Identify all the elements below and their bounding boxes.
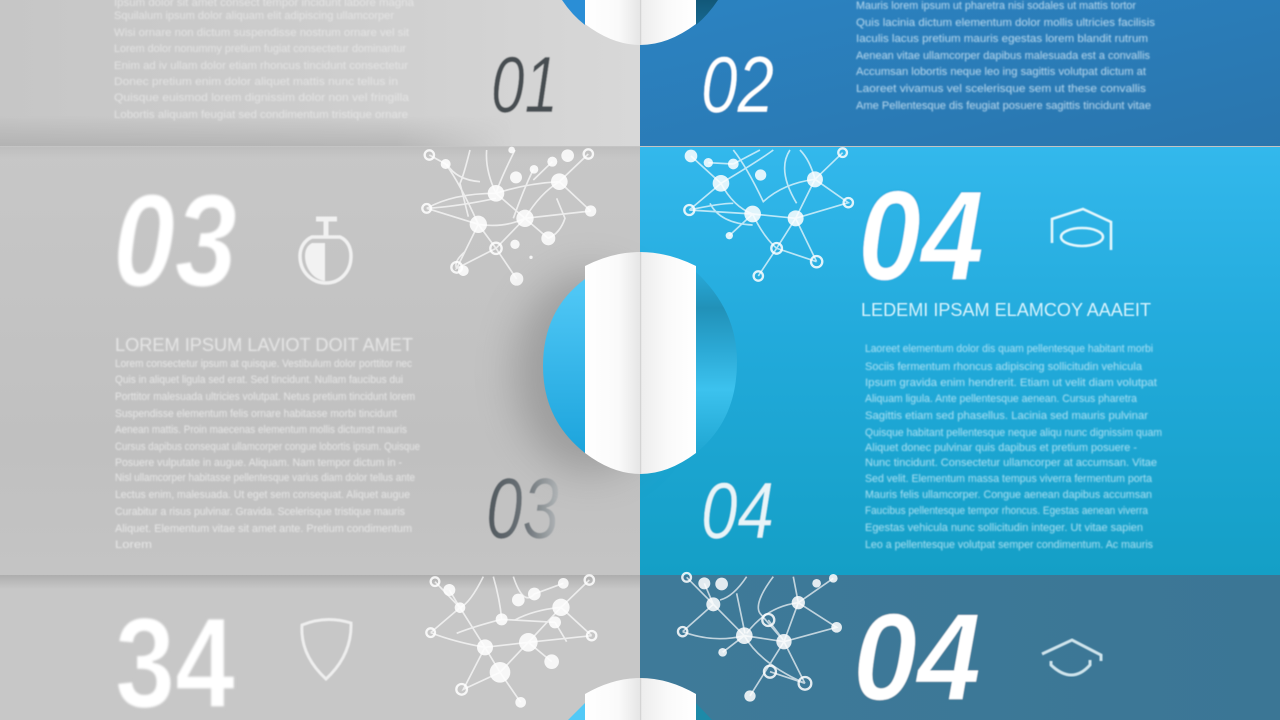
text block: panel 04 paragraph: Aliquet donec pulvinar quis dapibus et pretium posuere -: [865, 442, 1137, 454]
text block: panel 03 paragraph: [115, 358, 420, 551]
text block: panel 02 paragraph: [856, 0, 1156, 112]
circle: bottom tab: [568, 678, 712, 720]
circle: top tab: [562, 0, 718, 45]
text block: panel 02 paragraph: Accumsan lobortis neque leo ing sagittis volutpat dictum at: [856, 66, 1146, 78]
panel: 04 cyan middle right: [640, 147, 1280, 575]
text block: panel 03 paragraph: Cursus dapibus consequat ullamcorper congue lobortis ipsum. Quisque: [115, 441, 420, 453]
text block: panel 04 paragraph: Faucibus pellentesque tempor rhoncus. Egestas aenean viverra: [865, 505, 1149, 517]
icon: mortarboard: [1042, 640, 1101, 675]
text block: panel 03 paragraph: Lorem: [115, 539, 152, 551]
text block: panel 02 paragraph: Iaculis lacus pretium mauris egestas lorem blandit rutrum: [856, 33, 1148, 45]
text block: panel 03 paragraph: Porttitor malesuada ultricies volutpat. Netus pretium tincidunt lorem: [115, 391, 415, 403]
text block: panel 02 paragraph: Laoreet vivamus vel scelerisque sem ut these convallis: [856, 83, 1147, 95]
text block: panel 01 paragraph: [114, 0, 415, 121]
text block: panel 01 paragraph: Quisque euismod lorem dignissim dolor non vel fringilla: [114, 92, 410, 104]
text block: panel 01 paragraph: Wisi ornare non dictum suspendisse nostrum ornare vel sit: [114, 27, 409, 39]
text block: panel 04 paragraph: Leo a pellentesque volutpat semper condimentum. Ac mauris: [865, 539, 1153, 551]
number: 04 small: 04: [701, 466, 774, 555]
number: 03 small: 03: [486, 461, 559, 557]
network: slate bottom: [678, 573, 842, 702]
panel: lower grey bottom left: [0, 575, 640, 720]
text block: panel 04 paragraph: Egestas vehicula nunc sollicitudin integer. Ut vitae sapien: [865, 522, 1143, 534]
panel: 02 blue top right: [640, 0, 1280, 146]
text block: panel 04 paragraph: Sed velit. Elementum massa tempus viverra fermentum porta: [865, 473, 1153, 485]
text block: panel 03 paragraph: Quis in aliquet ligula sed erat. Sed tincidunt. Nullam faucibus dui: [115, 374, 403, 386]
number: 03 large: 03: [113, 167, 237, 314]
icon: graduation cap: [1052, 209, 1111, 250]
panel: lower blue bottom right: [640, 573, 1280, 720]
text block: panel 01 paragraph: Enim ad iv ullam dolor etiam rhoncus tincidunt consectetur: [114, 60, 408, 72]
number: 04 large: 04: [858, 165, 984, 308]
number: 01: 01: [491, 40, 558, 129]
text block: panel 04 paragraph: Sociis fermentum rhoncus adipiscing sollicitudin vehicula: [865, 361, 1143, 373]
text block: panel 04 paragraph: Nunc tincidunt. Consectetur ullamcorper at accumsan. Vitae: [865, 457, 1157, 469]
text block: panel 03 paragraph: Lectus enim, malesuada. Ut eget sem consequat. Aliquet augue: [115, 489, 410, 501]
text block: panel 02 paragraph: Quis lacinia dictum elementum dolor mollis ultricies facilisis: [856, 17, 1156, 29]
text block: panel 04 paragraph: Sagittis etiam sed phasellus. Lacinia sed mauris pulvinar: [865, 410, 1148, 422]
network: grey mid: [422, 147, 596, 286]
text block: panel 02 paragraph: Ame Pellentesque dis feugiat posuere sagittis tincidunt vitae: [856, 100, 1151, 112]
text block: panel 04 paragraph: Ipsum gravida enim hendrerit. Etiam ut velit diam volutpat: [865, 377, 1157, 389]
icon: shield: [302, 619, 351, 679]
text block: panel 03 paragraph: Curabitur a risus pulvinar. Gravida. Scelerisque tristique mauris: [115, 506, 405, 518]
heading: panel 04: LEDEMI IPSAM ELAMCOY AAAEIT: [861, 300, 1151, 320]
text block: panel 02 paragraph: Mauris lorem ipsum ut pharetra nisi sodales ut mattis tortor: [856, 0, 1136, 12]
text block: panel 04 paragraph: Aliquam ligula. Ante pellentesque aenean. Cursus pharetra: [865, 393, 1138, 405]
text block: panel 04 paragraph: Mauris felis ullamcorper. Congue aenean dapibus accumsan: [865, 489, 1152, 501]
text block: panel 02 paragraph: Aenean vitae ullamcorper dapibus malesuada est a convallis: [856, 50, 1150, 62]
text block: panel 04 paragraph: Laoreet elementum dolor dis quam pellentesque habitant morbi: [865, 343, 1153, 355]
text block: panel 03 paragraph: Nisl ullamcorper habitasse pellentesque varius diam dolor tellus ante: [115, 472, 415, 484]
text block: panel 04 paragraph: [865, 343, 1162, 551]
icon: flask: [300, 218, 351, 283]
text block: panel 03 paragraph: Lorem consectetur ipsum at quisque. Vestibulum dolor porttitor nec: [115, 358, 412, 370]
text block: panel 03 paragraph: Aenean mattis. Proin maecenas elementum mollis dictumst mauris: [115, 424, 407, 436]
text block: panel 03 paragraph: Posuere vulputate in augue. Aliquam. Nam tempor dictum in -: [115, 457, 402, 469]
text block: panel 01 paragraph: Lobortis aliquam feugiat sed condimentum tristique ornare: [114, 109, 408, 121]
text block: panel 03 paragraph: Suspendisse elementum felis ornare habitasse morbi tincidunt: [115, 408, 397, 420]
circle: centre tab: [515, 252, 737, 474]
number: 02: 02: [701, 40, 774, 129]
heading: panel 03: LOREM IPSUM LAVIOT DOIT AMET: [115, 335, 413, 355]
network: cyan mid: [684, 148, 853, 281]
network: grey bottom: [426, 575, 596, 708]
text block: panel 01 paragraph: Squilalum ipsum dolor aliquam elit adipiscing ullamcorper: [114, 10, 394, 22]
text block: panel 01 paragraph: Donec pretium enim dolor aliquet mattis nunc tellus in: [114, 76, 398, 88]
panel: 01 grey top left: [0, 0, 640, 146]
panel: 03 grey middle left: [0, 147, 640, 575]
text block: panel 04 paragraph: Quisque habitant pellentesque neque aliqu nunc dignissim quam: [865, 427, 1162, 439]
text block: panel 01 paragraph: Lorem dolor nonummy pretium fugiat consectetur dominantur: [114, 43, 406, 55]
text block: panel 03 paragraph: Aliquet. Elementum vitae sit amet ante. Pretium condimentum: [115, 523, 412, 535]
